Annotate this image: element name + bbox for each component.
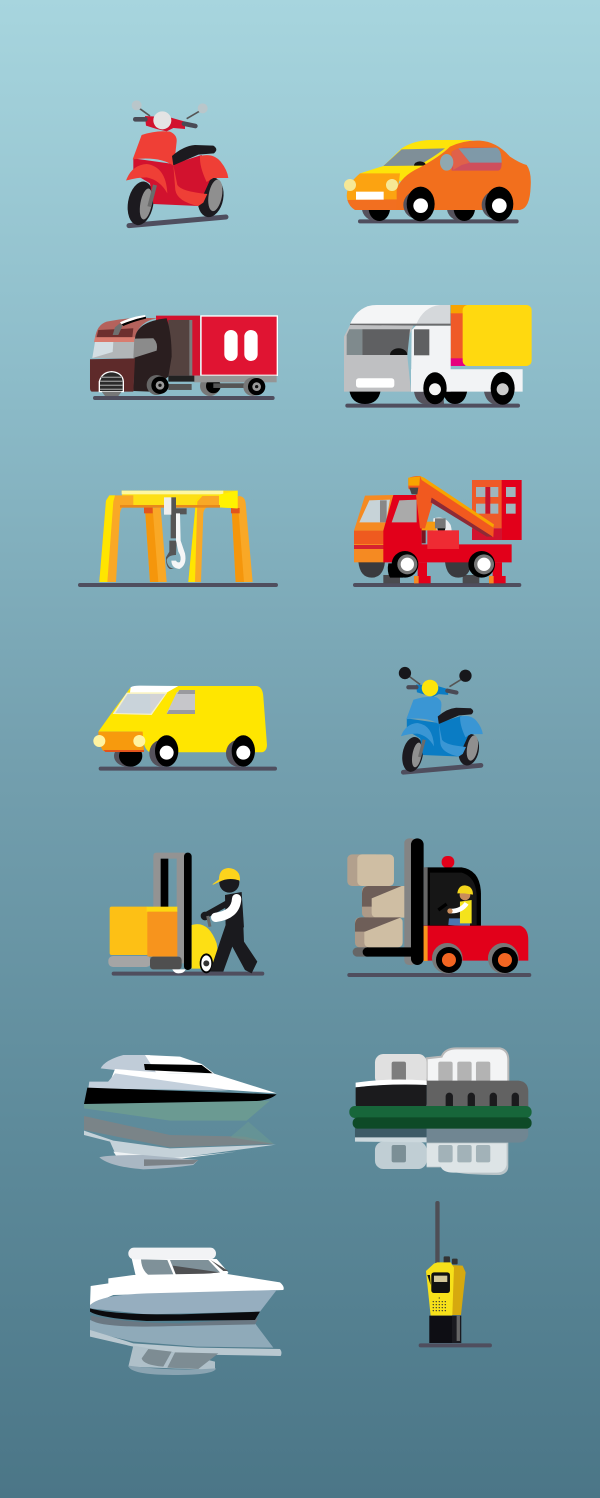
icon: white truck with yellow load	[344, 305, 532, 406]
icon: barge with reflection	[349, 1048, 532, 1175]
icon: dark red truck	[90, 315, 277, 398]
icon: yacht with reflection	[84, 1055, 277, 1169]
icon: pedestrian forklift with worker	[108, 853, 262, 974]
icon: white cabin boat with reflection	[90, 1248, 284, 1375]
icon: orange car	[344, 140, 531, 221]
icon: yellow van	[93, 686, 275, 769]
icon: truck with lift platform	[354, 476, 522, 585]
icon: walkie-talkie radio	[421, 1201, 490, 1345]
icon: red forklift with boxes	[347, 838, 529, 975]
icon: blue scooter	[399, 667, 483, 774]
icon: gantry crane	[80, 491, 276, 585]
icon: red scooter	[124, 100, 228, 227]
